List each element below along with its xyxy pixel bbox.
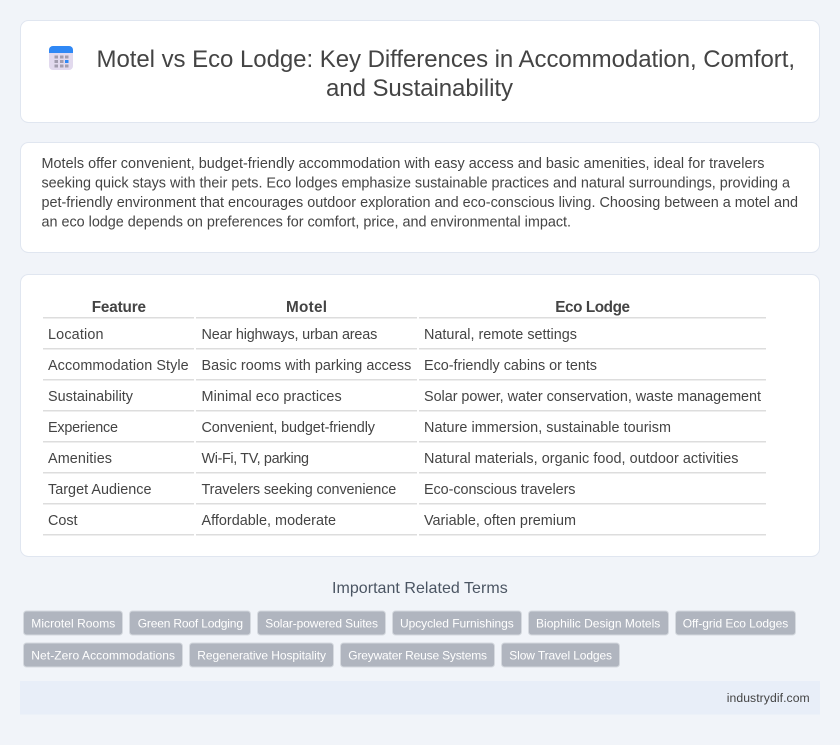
intro text: pet-friendly environment that encourages outdoor exploration and eco-conscious living. Choosing between a motel and — [42, 195, 798, 211]
title: and Sustainability — [326, 75, 513, 102]
row: cost: Variable, often premium — [424, 513, 576, 529]
row: accommodation style: Basic rooms with parking access — [202, 358, 411, 374]
row: target audience: Target Audience — [48, 482, 152, 498]
panel: comparison table — [20, 274, 820, 556]
intro text — [42, 156, 798, 230]
row: amenities: Wi-Fi, TV, parking — [202, 451, 309, 467]
row: target audience: Travelers seeking convenience — [202, 482, 396, 498]
row: target audience — [43, 482, 766, 504]
tag: Biophilic Design Motels — [536, 616, 660, 630]
row: sustainability: Minimal eco practices — [202, 389, 342, 405]
tag: Off-grid Eco Lodges — [683, 616, 788, 630]
tag — [130, 611, 250, 635]
row: amenities — [43, 451, 766, 474]
related term tags — [24, 611, 796, 667]
intro text: seeking quick stays with their pets. Eco lodges emphasize sustainable practices and natural surroundings, providing a — [42, 176, 790, 192]
heading: related terms: Important Related Terms — [332, 580, 508, 597]
tag: Upcycled Furnishings — [400, 616, 514, 630]
panel: introduction — [20, 142, 820, 252]
tag — [190, 643, 334, 667]
intro text: an eco lodge depends on preferences for comfort, price, and environmental impact. — [42, 214, 571, 230]
row: location: Natural, remote settings — [424, 327, 577, 343]
row: cost: Affordable, moderate — [202, 513, 336, 529]
row: target audience: Eco-conscious travelers — [424, 482, 576, 498]
row: sustainability — [43, 389, 766, 412]
tag — [258, 611, 386, 635]
row: accommodation style — [43, 358, 766, 380]
tag — [676, 611, 796, 635]
row: sustainability: Solar power, water conservation, waste management — [424, 389, 761, 405]
row: experience: Experience — [48, 420, 118, 436]
row: experience: Nature immersion, sustainable tourism — [424, 420, 671, 436]
row: accommodation style: Eco-friendly cabins or tents — [424, 358, 597, 374]
tag: Green Roof Lodging — [138, 616, 243, 630]
tag: Net-Zero Accommodations — [31, 648, 175, 662]
tag: Solar-powered Suites — [265, 616, 378, 630]
row: sustainability: Sustainability — [48, 389, 134, 405]
tag: Greywater Reuse Systems — [348, 648, 487, 662]
row: cost: Cost — [48, 513, 78, 529]
tag — [24, 643, 182, 667]
tag — [392, 611, 522, 635]
tag — [502, 643, 620, 667]
table header — [43, 299, 766, 318]
row: location: Near highways, urban areas — [202, 327, 377, 343]
header panel — [20, 20, 820, 122]
footer — [20, 681, 820, 714]
title — [96, 46, 795, 102]
table header: Eco Lodge — [555, 299, 630, 316]
tag — [528, 611, 668, 635]
row: experience: Convenient, budget-friendly — [202, 420, 376, 436]
icon: calendar — [49, 46, 73, 70]
table header: Feature — [92, 299, 146, 316]
row: location — [43, 327, 766, 350]
row: amenities: Amenities — [48, 451, 112, 467]
footer source: industrydif.com — [727, 691, 810, 705]
row: accommodation style: Accommodation Style — [48, 358, 189, 374]
tag: Regenerative Hospitality — [197, 648, 326, 662]
tag — [340, 643, 494, 667]
tag — [24, 611, 122, 635]
row: location: Location — [48, 327, 104, 343]
row: experience — [43, 420, 766, 442]
row: cost — [43, 513, 766, 536]
intro text: Motels offer convenient, budget-friendly accommodation with easy access and basic amenities, ideal for travelers — [42, 156, 764, 172]
title: Motel vs Eco Lodge: Key Differences in Accommodation, Comfort, — [96, 46, 795, 73]
row: amenities: Natural materials, organic food, outdoor activities — [424, 451, 738, 467]
tag: Slow Travel Lodges — [509, 648, 612, 662]
tag: Microtel Rooms — [31, 616, 115, 630]
table header: Motel — [286, 299, 327, 316]
